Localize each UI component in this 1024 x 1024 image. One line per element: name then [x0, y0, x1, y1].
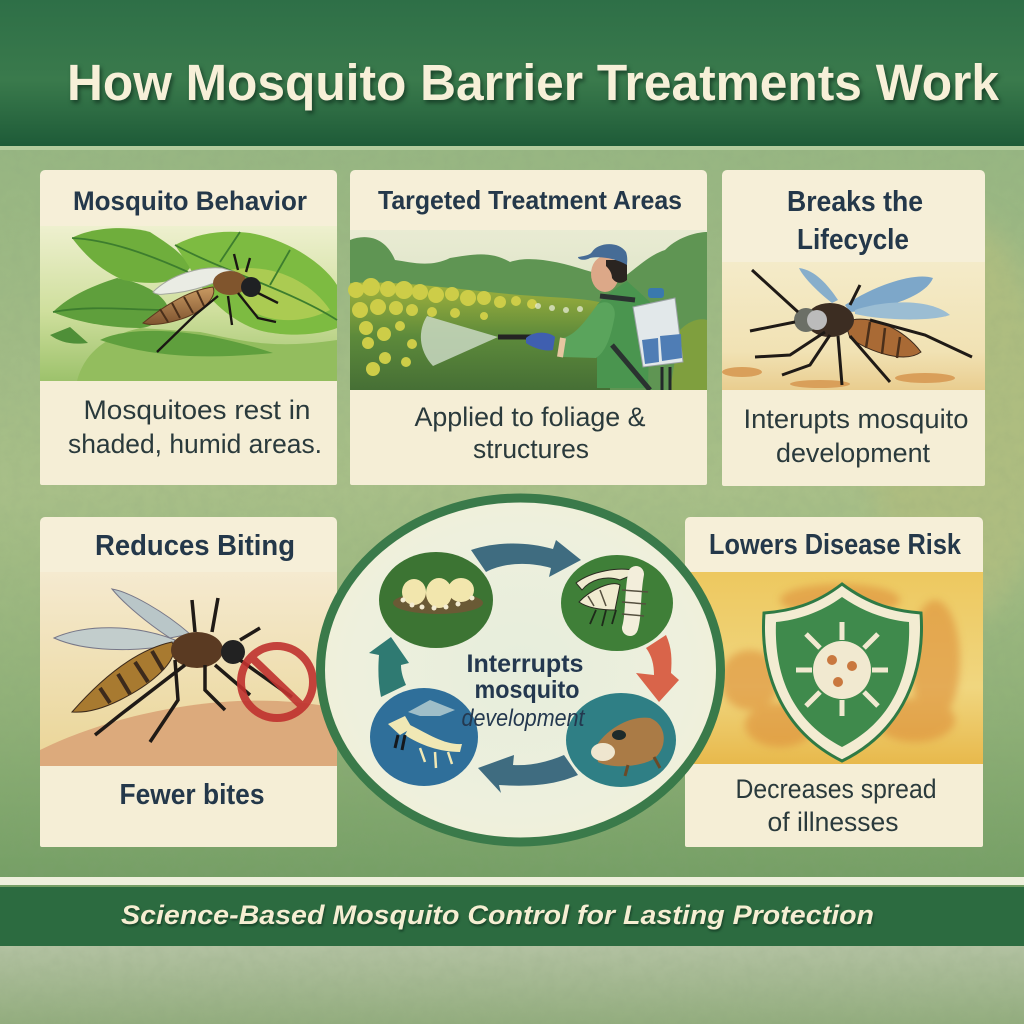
background trees — [350, 232, 707, 390]
spray — [421, 316, 498, 366]
body text — [414, 402, 646, 464]
header band — [0, 0, 1024, 150]
body text: Mosquitoes rest in — [84, 395, 310, 425]
sprayer tank — [633, 298, 683, 367]
hedge — [350, 282, 610, 390]
illustration: technician spraying hedge — [348, 230, 707, 390]
jacket — [597, 281, 650, 388]
center text: Interrupts — [466, 650, 584, 678]
arrow: adult to eggs — [369, 637, 409, 697]
mosquito — [143, 254, 278, 352]
icon: larva — [561, 555, 673, 651]
arrow: larva to pupa — [636, 635, 679, 702]
body text: development — [776, 438, 930, 468]
body text: Fewer bites — [120, 779, 264, 811]
illustration: mosquito on leaves — [40, 226, 337, 381]
icon: adult — [370, 688, 478, 786]
arrow: pupa to adult — [478, 755, 578, 793]
body text: Interupts mosquito — [744, 404, 968, 434]
icon: virus — [796, 622, 888, 716]
center text: development — [462, 705, 586, 732]
panel: mosquito behavior — [40, 170, 337, 485]
title: How Mosquito Barrier Treatments Work — [67, 54, 1000, 111]
body text — [68, 395, 322, 459]
head — [591, 256, 619, 292]
icon: no symbol — [241, 646, 313, 718]
footer band — [0, 877, 1024, 946]
cap — [578, 244, 627, 265]
body text — [744, 404, 968, 468]
body text: shaded, humid areas. — [68, 429, 322, 459]
mosquito — [54, 589, 292, 742]
panel: reduces biting — [40, 517, 337, 847]
illustration: shield with virus — [685, 572, 983, 764]
panel: lowers disease risk — [685, 517, 983, 847]
technician — [498, 244, 683, 390]
heading: lowers disease risk: Lowers Disease Risk — [709, 529, 962, 561]
icon: eggs — [379, 552, 493, 648]
panel: breaks the lifecycle — [722, 170, 985, 486]
body text: Applied to foliage & — [414, 402, 646, 432]
arrow: eggs to larva — [471, 540, 581, 577]
heading: breaks the lifecycle: Lifecycle — [797, 224, 909, 256]
body text: Decreases spread — [736, 774, 936, 804]
body text: structures — [473, 434, 589, 464]
heading: breaks the lifecycle — [787, 186, 923, 256]
lifecycle circle — [320, 498, 720, 842]
heading: breaks the lifecycle: Breaks the — [787, 186, 923, 218]
heading: mosquito behavior: Mosquito Behavior — [73, 186, 307, 216]
glove — [526, 333, 555, 351]
footer tagline: Science-Based Mosquito Control for Lasting Protection — [121, 900, 874, 930]
mosquito — [750, 268, 972, 385]
heading: reduces biting: Reduces Biting — [95, 530, 295, 562]
panel: targeted treatment areas — [348, 170, 707, 485]
center text: mosquito — [474, 676, 580, 704]
illustration: mosquito on sand — [722, 262, 985, 390]
body text — [736, 774, 936, 837]
heading: targeted treatment areas: Targeted Treatment Areas — [378, 185, 682, 215]
icon: pupa — [566, 693, 676, 787]
body text: of illnesses — [768, 807, 898, 837]
center text — [462, 650, 586, 732]
illustration: mosquito with no-bite sign — [40, 572, 337, 766]
icon: shield — [764, 584, 921, 761]
